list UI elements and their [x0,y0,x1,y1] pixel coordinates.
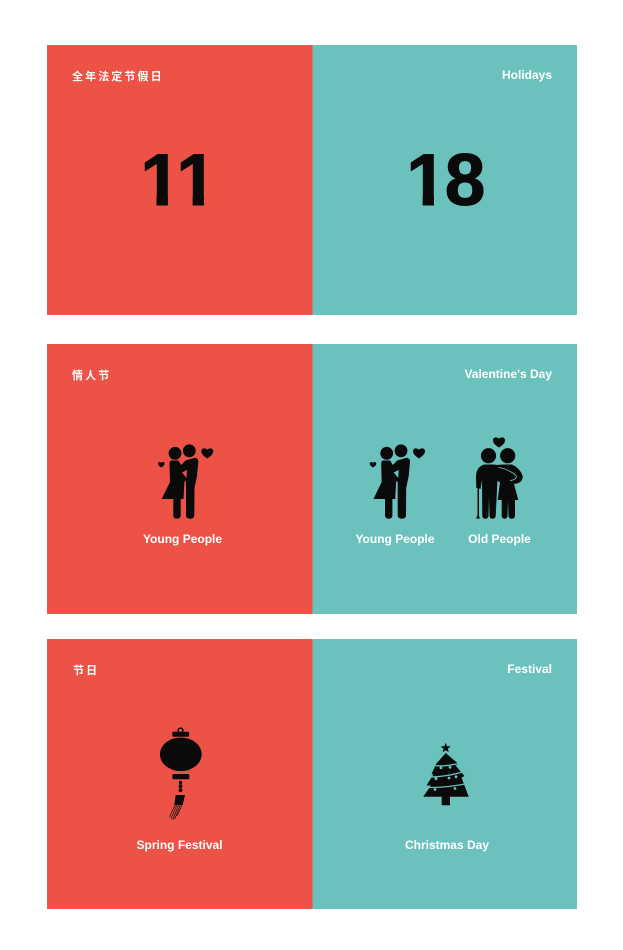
number: 18: 1 [406,140,447,221]
label: Spring Festival: Spring Festival [136,838,223,852]
heading: Holidays: Holidays [502,68,552,82]
panel: Festival West [312,639,577,909]
panel: Valentine West [312,344,577,614]
heading: 节日: 节日 [73,663,99,677]
heading: 情人节: 情人节 [72,368,111,382]
icon: christmas tree [423,743,470,805]
heading: Valentine's Day: Valentine's Day [464,367,552,381]
label: Old People: Old People [468,532,531,546]
label: Young People: Young People [355,532,435,546]
label: Young People: Young People [143,532,222,546]
icon: young couple [370,444,425,519]
icon: old couple [476,437,523,519]
number: 18 [410,153,484,206]
icon: lantern [160,728,202,820]
icon: young couple [158,444,213,519]
heading: 全年法定节假日: 全年法定节假日 [72,69,164,83]
number: 11 [144,154,204,206]
panel: holidays West [312,45,577,315]
heading: Festival: Festival [507,662,552,676]
panel: holidays China [47,45,312,315]
number: 18: 8 [445,140,485,221]
label: Christmas Day: Christmas Day [405,838,489,852]
number: 11: 1 [176,140,217,221]
number: 11: 1 [140,140,181,221]
panel: Valentine China [47,344,312,614]
panel: Festival China [47,639,312,909]
